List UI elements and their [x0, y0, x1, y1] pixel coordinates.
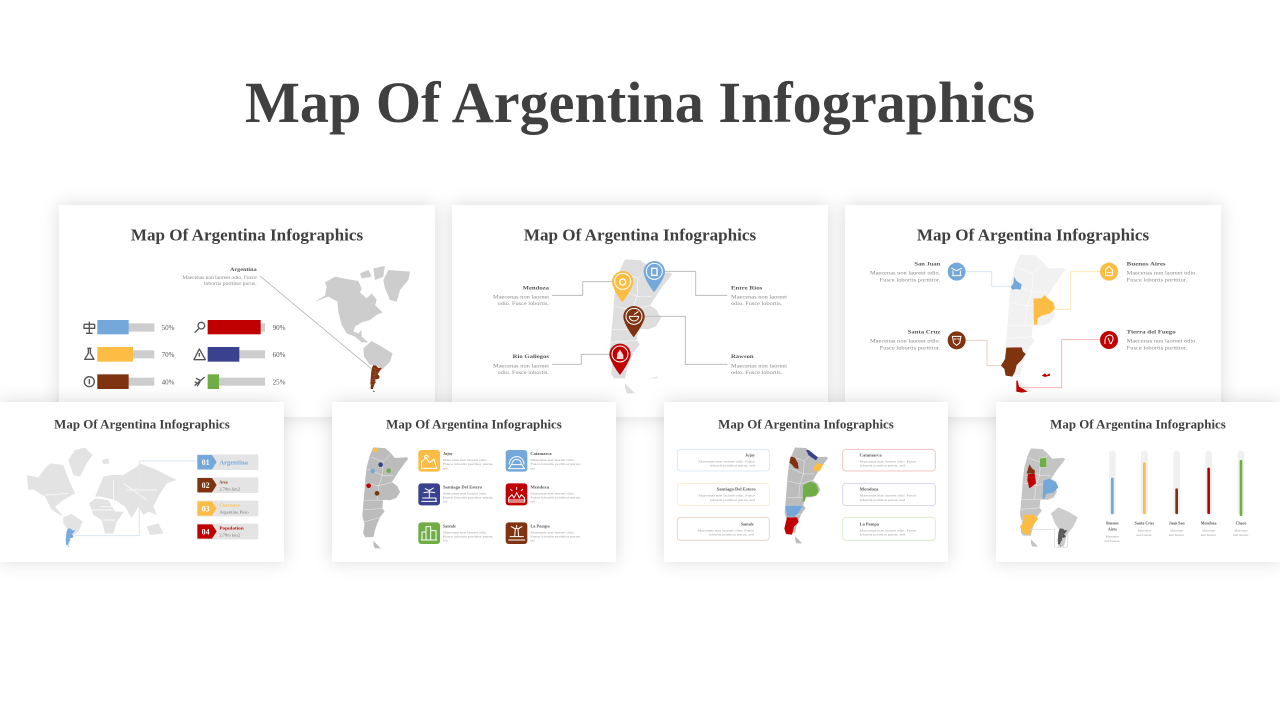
connector lines: [966, 272, 1011, 286]
icon: Tierra del Fuego: [1100, 331, 1118, 349]
panel: highlighted provinces: [845, 205, 1221, 417]
column: Mendoza: Maecenas: [1202, 529, 1216, 533]
province: San Juan: [1011, 277, 1022, 290]
panel E heading: Map Of Argentina Infographics: [386, 418, 562, 432]
label: Rio Gallegos: Rio Gallegos: [513, 354, 550, 360]
province: Tierra del Fuego: [1016, 373, 1050, 393]
Argentina map with dots: [362, 447, 408, 548]
panel: vertical bars: [996, 402, 1280, 562]
box: Santiago Del Estero: lobortis porttitor purus, sed: [710, 498, 755, 503]
item 02 Area: 2.78m km2: [219, 487, 240, 491]
label: Buenos Aires: [1127, 262, 1197, 283]
box: La Pampa: Maecenas non laoreet odio. Fusce: [860, 528, 917, 532]
item: Jujuy: sed: [443, 466, 448, 470]
box: Catamarca: [843, 449, 935, 471]
item 03 Currency: 03: [202, 504, 210, 513]
Argentina map: [610, 259, 672, 393]
label: San Juan: [870, 262, 941, 283]
item 04 Population: Population: [219, 526, 245, 531]
box: Jujuy: Jujuy: [745, 452, 755, 457]
label: Tierra del Fuego: Maecenas non laoreet odio.: [1127, 339, 1197, 345]
column: Chaco: Maecenas: [1234, 529, 1248, 533]
box: La Pampa: [843, 517, 935, 540]
bar 50%: 50%: [162, 324, 175, 332]
box: La Pampa: lobortis porttitor purus, sed: [860, 533, 905, 538]
column: Juan San: [1169, 451, 1185, 537]
panel: outlined boxes with coloured map: [664, 402, 948, 562]
item: Santafe: sed: [443, 539, 448, 543]
panel: pins on map: [452, 205, 828, 417]
label: Rawson: Maecenas non laoreet: [731, 363, 788, 369]
item: Santafe: Maecenas non laoreet odio.: [443, 530, 488, 534]
box: La Pampa: La Pampa: [860, 521, 879, 526]
box: Santafe: [677, 517, 769, 540]
label: Santa Cruz: Fusce lobortis porttitor.: [880, 345, 940, 351]
column: Juan San: Juan San: [1169, 521, 1185, 526]
bar 50%: [84, 320, 175, 334]
column: Mendoza: Mendoza: [1201, 521, 1217, 526]
column: Juan San: Maecenas: [1170, 529, 1184, 533]
label: Tierra del Fuego: Tierra del Fuego: [1127, 330, 1176, 336]
item: Mendoza: Maecenas non laoreet odio.: [530, 491, 575, 495]
panel B heading: Map Of Argentina Infographics: [524, 226, 757, 245]
item: Santiago Del Estero: Santiago Del Estero: [443, 484, 482, 489]
column: Santa Cruz: Maecenas: [1138, 529, 1152, 533]
bar 70%: 70%: [162, 351, 175, 359]
item: Catamarca: [506, 450, 581, 472]
label: San Juan: Maecenas non laoreet odio.: [870, 271, 940, 277]
Argentina map: [784, 447, 828, 543]
pin: Mendoza: [612, 271, 633, 302]
pin: Entre Rios: [644, 261, 665, 292]
South America inset: [1030, 507, 1078, 547]
column: Buenos Aires: Maecenas: [1106, 535, 1120, 539]
column: Chaco: non laoreet.: [1233, 533, 1249, 537]
item 01 Argentina: 01: [202, 458, 210, 467]
panel: world map: [0, 402, 284, 562]
label: Entre Rios: Maecenas non laoreet: [731, 294, 788, 300]
box: Mendoza: Maecenas non laoreet odio. Fusce: [860, 494, 917, 498]
leader line: [75, 461, 197, 536]
item: Santafe: Fusce lobortis porttitor purus,: [443, 534, 494, 539]
item: Catamarca: sed: [530, 466, 535, 470]
item: Santiago Del Estero: Maecenas non laoreet odio.: [443, 491, 488, 495]
item 03 Currency: Currency: [219, 503, 240, 508]
item: Mendoza: Mendoza: [530, 484, 549, 489]
icon: Buenos Aires: [1100, 263, 1118, 281]
item: Santafe: [418, 522, 494, 544]
label: San Juan: San Juan: [914, 262, 941, 268]
label: San Juan: Fusce lobortis porttitor.: [880, 277, 940, 283]
icon: San Juan: [948, 263, 966, 281]
item: Catamarca: Catamarca: [530, 451, 552, 456]
label: Buenos Aires: Buenos Aires: [1127, 262, 1167, 268]
province: Santa Cruz: [1001, 347, 1026, 377]
box: Santiago Del Estero: Santiago Del Estero: [717, 487, 756, 492]
column: Buenos Aires: Buenos: [1106, 521, 1119, 526]
label: Mendoza: Mendoza: [523, 285, 549, 291]
item: Santiago Del Estero: sed: [443, 500, 448, 504]
item 02 Area: [197, 477, 258, 493]
box: Jujuy: lobortis porttitor purus, sed: [710, 464, 755, 469]
label: Santa Cruz: Santa Cruz: [908, 330, 941, 336]
Argentina callout text: lobortis porttitor purus.: [204, 281, 257, 287]
item 04 Population: [197, 524, 258, 539]
bar 40%: 40%: [162, 378, 175, 386]
main title: Map Of Argentina Infographics: [245, 70, 1035, 135]
panel D heading: Map Of Argentina Infographics: [54, 418, 230, 432]
item: Mendoza: sed: [530, 500, 535, 504]
Argentina highlight: [66, 528, 75, 547]
box: Catamarca: Maecenas non laoreet odio. Fusce: [860, 459, 917, 463]
column: Juan San: non laoreet.: [1169, 533, 1185, 537]
box: Mendoza: Mendoza: [860, 487, 878, 492]
item: La Pampa: La Pampa: [530, 523, 550, 528]
label: Buenos Aires: Fusce lobortis porttitor.: [1127, 277, 1187, 283]
bar 25%: [195, 374, 286, 389]
item: La Pampa: sed: [530, 539, 535, 543]
Argentina highlight: [370, 365, 382, 392]
label: Santa Cruz: [870, 330, 941, 351]
label: Rio Gallegos: [493, 354, 550, 376]
column: Chaco: [1233, 451, 1249, 537]
Argentina callout text: Argentina: [230, 267, 257, 273]
label: Entre Rios: Entre Rios: [731, 285, 763, 291]
item 01 Argentina: Argentina: [219, 459, 249, 466]
column: Santa Cruz: non laoreet.: [1136, 533, 1152, 537]
panel: bars with Americas map: [59, 205, 435, 417]
column: Buenos Aires: [1104, 451, 1120, 543]
bar 60%: 60%: [273, 351, 286, 359]
label: Entre Rios: odio. Fusce lobortis.: [731, 301, 782, 307]
label: Rawson: odio. Fusce lobortis.: [731, 370, 782, 376]
label: Mendoza: [493, 285, 550, 307]
pin: Rawson: [623, 306, 645, 337]
icon: Santa Cruz: [948, 331, 966, 349]
item: La Pampa: Fusce lobortis porttitor purus,: [530, 534, 581, 539]
column: Chaco: Chaco: [1236, 521, 1246, 526]
bar 90%: [195, 320, 286, 334]
label: Rio Gallegos: Maecenas non laoreet: [493, 363, 550, 369]
label: Tierra del Fuego: [1127, 330, 1197, 351]
item 02 Area: 02: [202, 481, 210, 490]
bar 25%: 25%: [273, 378, 286, 386]
item: Jujuy: [418, 450, 494, 472]
column: Santa Cruz: Santa Cruz: [1135, 521, 1154, 526]
label: Tierra del Fuego: Fusce lobortis porttitor.: [1127, 345, 1187, 351]
item 01 Argentina: [197, 454, 258, 470]
item: Catamarca: Maecenas non laoreet odio.: [530, 458, 575, 462]
item: Mendoza: Fusce lobortis porttitor purus,: [530, 495, 581, 500]
box: Mendoza: [843, 483, 935, 506]
panel F heading: Map Of Argentina Infographics: [718, 418, 894, 432]
leader line: [260, 276, 372, 369]
label: Entre Rios: [731, 285, 788, 307]
box: Catamarca: lobortis porttitor purus, sed: [860, 464, 905, 469]
item: Catamarca: Fusce lobortis porttitor purus,: [530, 462, 581, 467]
item 04 Population: 04: [202, 527, 210, 536]
bar 90%: 90%: [273, 324, 286, 332]
Malvinas: [651, 376, 658, 379]
box: Santafe: lobortis porttitor purus, sed: [709, 533, 754, 538]
world map: [27, 448, 177, 547]
box: Jujuy: Maecenas non laoreet odio. Fusce: [698, 459, 756, 463]
box: Santafe: Maecenas non laoreet odio. Fusce: [697, 528, 755, 532]
item 04 Population: 2.78m km2: [219, 534, 240, 538]
column: Buenos Aires: non laoreet.: [1104, 539, 1120, 543]
column: Buenos Aires: Aires: [1108, 527, 1117, 532]
column: Mendoza: [1201, 451, 1217, 537]
province: Buenos Aires: [1034, 295, 1055, 325]
label: Rawson: Rawson: [731, 354, 755, 360]
label: Santa Cruz: Maecenas non laoreet odio.: [870, 339, 940, 345]
label: Mendoza: Maecenas non laoreet: [493, 294, 550, 300]
bar 40%: [84, 374, 175, 389]
label: Mendoza: odio. Fusce lobortis.: [498, 301, 549, 307]
item 03 Currency: Argentine Peso: [219, 511, 249, 515]
bar 60%: [194, 347, 286, 362]
label: Rio Gallegos: odio. Fusce lobortis.: [498, 370, 549, 376]
panel C heading: Map Of Argentina Infographics: [917, 226, 1150, 245]
box: Jujuy: [677, 449, 769, 471]
column: Santa Cruz: [1135, 451, 1154, 537]
item: Mendoza: [506, 483, 581, 505]
panel: icon grid: [332, 402, 616, 562]
pin: Rio Gallegos: [609, 344, 631, 375]
label: Rawson: [731, 354, 788, 376]
Argentina callout text: Maecenas non laoreet odio. Fusce: [182, 275, 257, 281]
item 02 Area: Area: [219, 479, 228, 484]
item: Santiago Del Estero: Fusce lobortis porttitor purus,: [443, 495, 494, 500]
item: Santafe: Santafe: [443, 523, 456, 528]
item: Jujuy: Maecenas non laoreet odio.: [443, 458, 488, 462]
box: Catamarca: Catamarca: [860, 452, 882, 457]
item: La Pampa: [506, 522, 581, 544]
Americas map: [315, 266, 410, 370]
box: Santiago Del Estero: [677, 483, 769, 506]
panel A heading: Map Of Argentina Infographics: [131, 226, 364, 245]
panel G heading: Map Of Argentina Infographics: [1050, 418, 1226, 432]
Argentina map: [1020, 448, 1065, 547]
bar 70%: [85, 347, 175, 362]
item: Santiago Del Estero: [418, 483, 494, 505]
Argentina callout text: [182, 267, 257, 287]
item: Jujuy: Fusce lobortis porttitor purus,: [443, 462, 494, 467]
item: La Pampa: Maecenas non laoreet odio.: [530, 530, 575, 534]
Argentina map: [1006, 254, 1066, 391]
box: Santiago Del Estero: Maecenas non laoreet odio. Fusce: [698, 494, 756, 498]
box: Santafe: Santafe: [741, 521, 754, 526]
item: Jujuy: Jujuy: [443, 451, 453, 456]
box: Mendoza: lobortis porttitor purus, sed: [860, 498, 905, 503]
connector lines: [552, 271, 727, 364]
item 03 Currency: [197, 501, 258, 516]
label: Buenos Aires: Maecenas non laoreet odio.: [1127, 271, 1197, 277]
column: Mendoza: non laoreet.: [1201, 533, 1217, 537]
